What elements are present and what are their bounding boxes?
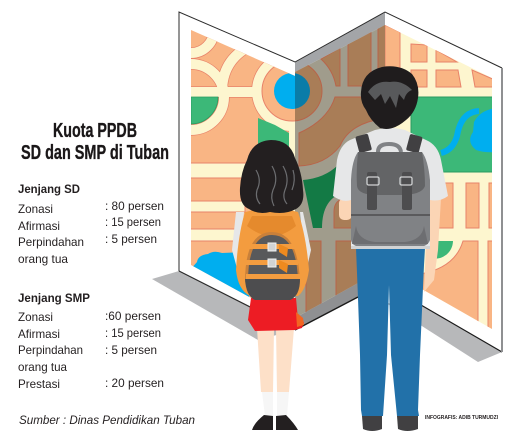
girl: sleeves <box>232 212 311 272</box>
text block: Jenjang SMP: :60 persen <box>105 309 161 323</box>
text block: Jenjang SMP: : 20 persen <box>105 376 164 390</box>
girl: legs <box>257 328 294 392</box>
folded map wall <box>158 7 502 352</box>
text block: Jenjang SMP: : 15 persen <box>105 326 161 340</box>
boy: hair <box>361 66 418 129</box>
text block: Jenjang SMP: Perpindahan <box>18 343 83 357</box>
text block: Jenjang SD: orang tua <box>18 252 68 266</box>
map: left panel <box>191 30 295 298</box>
map: middle panel, shaded <box>295 25 385 316</box>
boy figure <box>333 66 448 431</box>
text block: Jenjang SMP: Afirmasi <box>18 327 60 341</box>
text block: Jenjang SD: Perpindahan <box>18 235 84 249</box>
girl figure <box>232 140 311 430</box>
infographic credit: INFOGRAFIS: ADIB TURMUDZI <box>425 415 498 421</box>
text block: Jenjang SMP: Prestasi <box>18 377 60 391</box>
boy: backpack <box>351 133 430 249</box>
text block: Jenjang SMP: Zonasi <box>18 310 53 324</box>
title: Kuota PPDB <box>53 120 137 142</box>
girl: skirt <box>248 298 304 331</box>
text block: Jenjang SMP: : 5 persen <box>105 343 157 357</box>
title <box>21 120 169 164</box>
map: right panel <box>385 25 492 329</box>
boy: jeans <box>356 248 425 416</box>
text block: Jenjang SD: : 15 persen <box>105 215 161 229</box>
text block: Jenjang SD: : 80 persen <box>105 199 164 213</box>
text block: Jenjang SMP <box>18 291 164 391</box>
text block: Jenjang SD: Jenjang SD <box>18 182 80 196</box>
text block: Jenjang SD <box>18 182 164 266</box>
text block: Jenjang SMP: Jenjang SMP <box>18 291 90 305</box>
boy: arms <box>339 198 441 292</box>
girl: socks <box>262 392 289 416</box>
text block: Jenjang SD: : 5 persen <box>105 232 157 246</box>
text block: Jenjang SMP: orang tua <box>18 360 67 374</box>
source note: Sumber : Dinas Pendidikan Tuban <box>19 413 195 427</box>
boy: shirt <box>333 128 448 246</box>
girl: backpack <box>236 208 309 300</box>
boy: shoes <box>362 416 418 431</box>
girl: shoes <box>252 415 298 430</box>
floor shadow <box>152 271 502 362</box>
text block: Jenjang SD: Zonasi <box>18 202 53 216</box>
text block: Jenjang SD: Afirmasi <box>18 219 60 233</box>
girl: hair <box>240 140 303 213</box>
title: SD dan SMP di Tuban <box>21 142 169 164</box>
